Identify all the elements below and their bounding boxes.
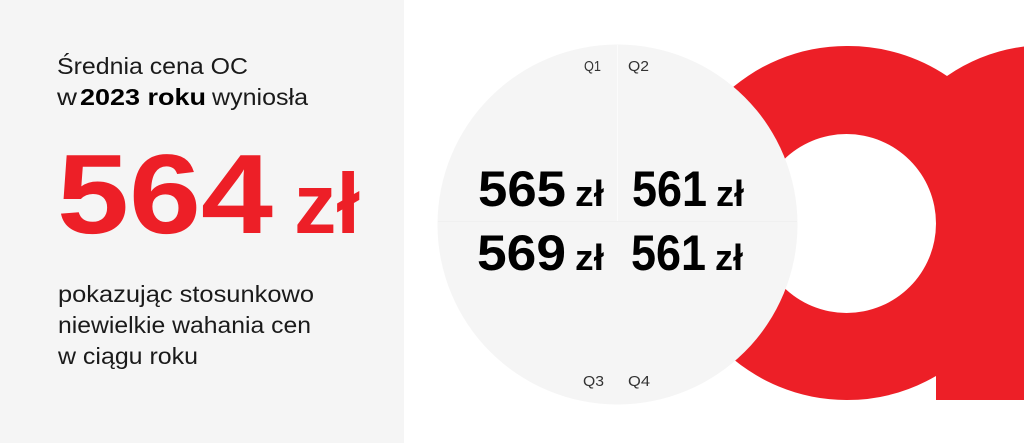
heading: average price: w (56, 84, 77, 110)
heading: average price (56, 52, 308, 110)
text block: description: pokazując stosunkowo (58, 281, 314, 307)
heading: average price: wyniosła (211, 84, 308, 110)
Q1 label: Q1 (584, 58, 601, 75)
panel: left background (0, 0, 404, 443)
Q2 value: 561 (632, 161, 707, 217)
Q3 label: Q3 (583, 373, 604, 390)
Q1 value (478, 161, 604, 217)
text block: description: w ciągu roku (57, 343, 198, 369)
big number: 564 zł (57, 131, 360, 257)
heading: average price: Średnia cena OC (57, 52, 248, 79)
Q3 value: zł (575, 237, 604, 278)
Q2 label: Q2 (628, 58, 649, 75)
Q4 value: 561 (631, 225, 706, 281)
Q4 value: zł (715, 237, 743, 278)
red graphic: ring and block (670, 46, 1024, 400)
text block: description: niewielkie wahania cen (58, 312, 311, 338)
big number: 564 zł: 564 (57, 131, 273, 257)
Q3 value (477, 225, 604, 281)
Q1 value: 565 (478, 161, 566, 217)
text block: description (57, 281, 314, 369)
Q1 value: zł (575, 173, 604, 214)
Q4 label: Q4 (628, 373, 650, 390)
heading: average price: 2023 roku (80, 84, 206, 110)
panel: quarterly circle (438, 44, 798, 404)
Q2 value: zł (716, 173, 744, 214)
Q3 value: 569 (477, 225, 566, 281)
big number: 564 zł: zł (294, 157, 360, 252)
